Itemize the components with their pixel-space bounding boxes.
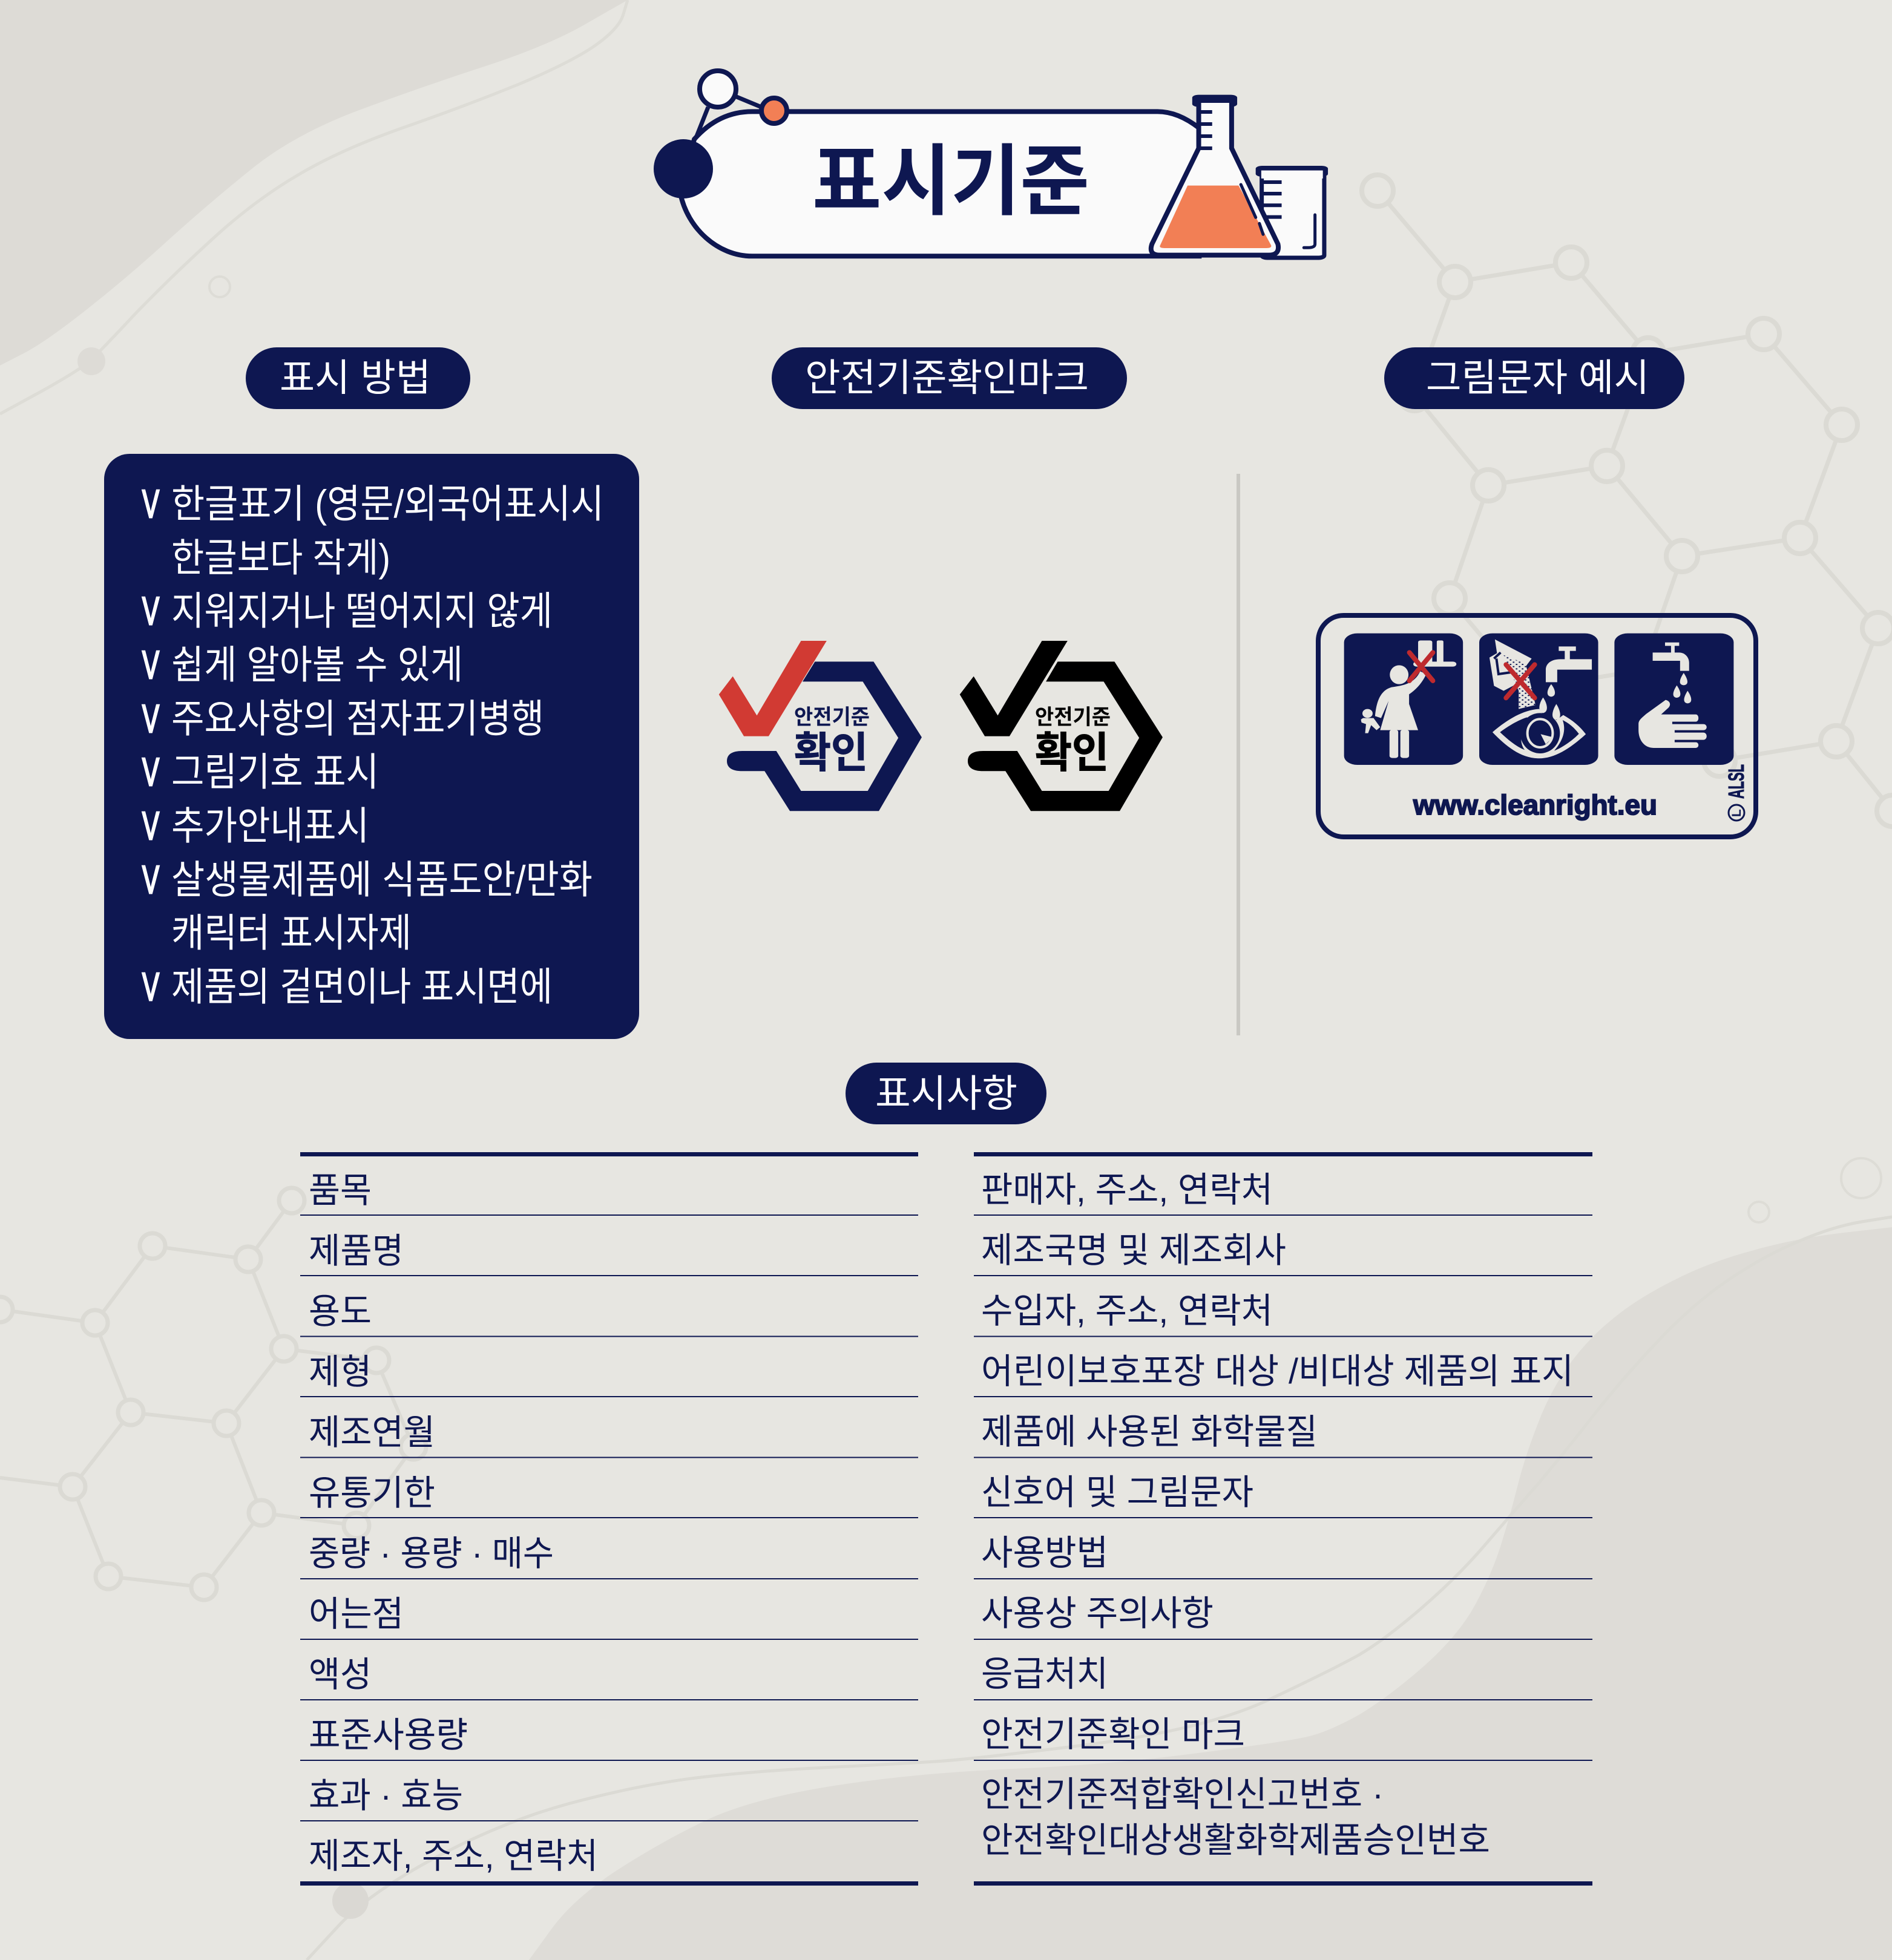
panel: display method list	[104, 454, 639, 1039]
icon: keep out of reach of children	[1344, 634, 1463, 765]
icon: wash hands	[1614, 634, 1733, 765]
row: 액성: 액성	[309, 1655, 372, 1694]
icon: flask	[1151, 95, 1278, 255]
row: 용도: 용도	[309, 1292, 372, 1331]
row: 제조연월: 제조연월	[309, 1413, 435, 1452]
icon: do not get in eyes	[1479, 634, 1598, 765]
section pill: 안전기준확인마크	[772, 347, 1127, 409]
ALSL mark: ALSL	[1724, 764, 1749, 799]
list item 7: 캐릭터 표시자제	[171, 911, 412, 955]
row: 중량 용량 매수: 중량 · 용량 · 매수	[309, 1534, 554, 1573]
section pill: 표시 방법	[246, 347, 470, 409]
list item 7	[142, 857, 593, 955]
row: 안전기준확인 마크: 안전기준확인 마크	[981, 1715, 1245, 1754]
list item 4: V	[142, 696, 159, 741]
row: 어는점: 어는점	[309, 1595, 404, 1634]
list item 3: 쉽게 알아볼 수 있게	[171, 643, 463, 687]
table: right column	[974, 1152, 1592, 1886]
list item 6: V	[142, 804, 159, 848]
list item 4: 주요사항의 점자표기병행	[171, 696, 544, 741]
icon: white atom	[700, 71, 736, 107]
row: 품목: 품목	[309, 1171, 372, 1210]
list item 6: 추가안내표시	[171, 804, 369, 848]
row: 유통기한: 유통기한	[309, 1473, 435, 1513]
row: 응급처치: 응급처치	[981, 1654, 1108, 1694]
row: 신호어: 신호어 및 그림문자	[981, 1473, 1253, 1512]
title banner: 표시기준	[654, 71, 1328, 258]
logo: colour safety check mark	[719, 641, 922, 811]
row: 주의사항: 사용상 주의사항	[981, 1594, 1214, 1633]
logo: black safety check mark: 확인	[1035, 729, 1109, 776]
heading: 표시기준	[812, 139, 1089, 225]
section pill: 표시사항	[846, 1063, 1046, 1124]
row: 신고번호 승인번호: 안전기준적합확인신고번호 ·	[981, 1775, 1384, 1814]
list item 1: V	[142, 482, 159, 526]
list item 1: 한글표기 (영문/외국어표시시	[171, 482, 604, 526]
list item 7: 살생물제품에 식품도안/만화	[171, 857, 593, 902]
icon: beaker	[1256, 166, 1328, 258]
logo: black safety check mark: 안전기준	[1035, 706, 1111, 729]
list item 3: V	[142, 643, 159, 687]
list item 2: 지워지거나 떨어지지 않게	[171, 589, 553, 633]
logo: colour safety check mark: 안전기준	[794, 706, 870, 729]
row: 신고번호 승인번호	[981, 1775, 1490, 1860]
icon: orange atom	[761, 98, 787, 123]
row: 사용방법: 사용방법	[981, 1533, 1108, 1573]
table: left column	[300, 1152, 918, 1886]
row: 수입자: 수입자, 주소, 연락처	[981, 1291, 1273, 1331]
section pill: 표시 방법: 표시 방법	[280, 357, 431, 399]
row: 화학물질: 제품에 사용된 화학물질	[981, 1412, 1318, 1452]
banner pill	[680, 111, 1199, 256]
list item 5: 그림기호 표시	[171, 750, 379, 794]
list item 7: V	[142, 857, 159, 902]
section pill: 안전기준확인마크: 안전기준확인마크	[805, 357, 1089, 399]
list item 5: V	[142, 750, 159, 794]
molecule connectors	[697, 97, 761, 136]
section pill: 그림문자 예시	[1384, 347, 1684, 409]
ALSL mark: L	[1730, 809, 1744, 817]
list item 1	[142, 482, 604, 580]
row: 제조자 주소 연락처: 제조자, 주소, 연락처	[309, 1837, 598, 1876]
row: 효과 효능: 효과 · 효능	[309, 1776, 463, 1815]
section pill: 표시사항: 표시사항	[875, 1073, 1017, 1115]
label URL: www.cleanright.eu	[1413, 789, 1657, 821]
panel: pictogram example label	[1318, 615, 1756, 837]
logo: colour safety check mark: 확인	[794, 729, 868, 776]
row: 신고번호 승인번호: 안전확인대상생활화학제품승인번호	[981, 1821, 1490, 1860]
row: 제조국명: 제조국명 및 제조회사	[981, 1231, 1286, 1270]
list item 1: 한글보다 작게)	[171, 536, 390, 580]
row: 제품명: 제품명	[309, 1231, 404, 1271]
list item 8: V	[142, 965, 159, 1009]
icon: dark atom	[654, 139, 713, 198]
row: 제형: 제형	[309, 1352, 372, 1392]
row: 표준사용량: 표준사용량	[309, 1716, 468, 1755]
row: 어린이보호포장: 어린이보호포장 대상 /비대상 제품의 표지	[981, 1352, 1574, 1391]
section pill: 그림문자 예시: 그림문자 예시	[1426, 357, 1649, 399]
list item 2: V	[142, 589, 159, 633]
logo: black safety check mark	[960, 641, 1163, 811]
row: 판매자: 판매자, 주소, 연락처	[981, 1170, 1273, 1210]
ALSL mark	[1724, 764, 1749, 821]
list item 8: 제품의 겉면이나 표시면에	[171, 965, 553, 1009]
